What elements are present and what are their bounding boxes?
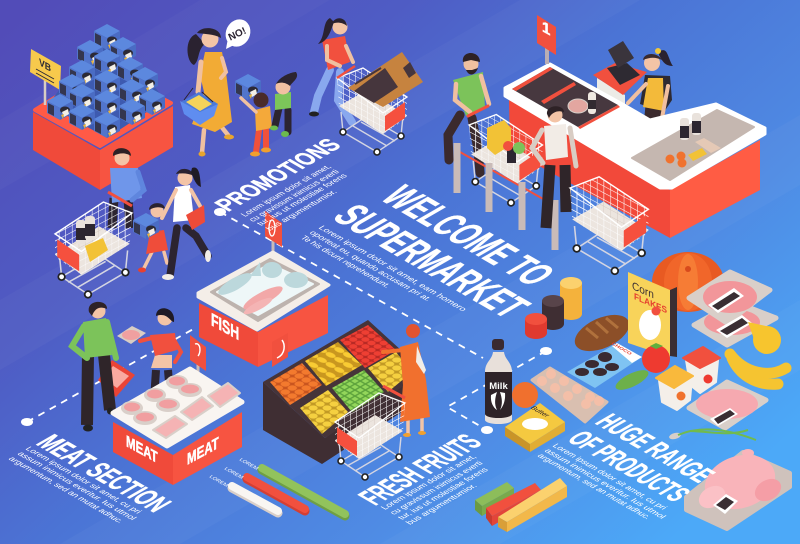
- cash desk: [593, 41, 647, 110]
- sign: banana: [272, 333, 288, 367]
- legend bar: green: [262, 468, 345, 516]
- pumpkin: [652, 252, 724, 312]
- person: man in blue with cart: [110, 148, 144, 228]
- labels: MEAT: [126, 433, 219, 469]
- milk bottle: Milk: [489, 381, 508, 392]
- connector dots: [21, 208, 552, 434]
- cereal box: corn flakes: Corn: [632, 280, 654, 302]
- cashier: [628, 48, 673, 122]
- meat trays: [121, 375, 240, 438]
- person: girl crying: [270, 72, 297, 137]
- legend labels: LOREM: [223, 467, 244, 480]
- person: woman in red top holding tray: [117, 308, 181, 400]
- counter faces: [509, 100, 760, 238]
- pear: [748, 322, 781, 354]
- person: woman in white top with red bag: [162, 168, 211, 280]
- paragraph: promotions: Lorem ipsum dolor sit amet,: [238, 163, 333, 218]
- basket: [180, 88, 218, 125]
- title: welcome to supermarket: WELCOME TO: [370, 179, 565, 292]
- dashed connector: promotions: [220, 212, 483, 358]
- queue posts and ropes: [457, 143, 555, 250]
- sign: VB: VB: [39, 57, 51, 75]
- person: bearded man in green: [448, 53, 489, 173]
- tomato: [642, 343, 670, 373]
- person: woman in yellow dress with basket: [180, 15, 255, 157]
- sign: fish: [265, 211, 282, 254]
- sign: meat: [190, 335, 206, 378]
- orange: [512, 382, 538, 408]
- bin: yellow fruit: [368, 352, 412, 392]
- paragraph: fresh fruits: Lorem ipsum dolor sit amet,: [378, 453, 479, 511]
- legend labels: LOREM: [208, 475, 229, 488]
- sink area: [632, 110, 754, 180]
- person: boy with box: [235, 74, 272, 156]
- groceries: [487, 120, 525, 163]
- panel: checkout counter: [505, 15, 765, 238]
- bin: greens: [332, 370, 384, 412]
- stand body: [263, 320, 425, 464]
- panel: fruit stand: [263, 320, 425, 464]
- monitor: [607, 63, 640, 85]
- dashed connector: products to fresh fruits: [447, 351, 546, 430]
- cart contents: [76, 216, 108, 262]
- bread: [569, 308, 635, 358]
- stand base: [33, 68, 173, 190]
- heading: promotions: PROMOTIONS: [209, 135, 348, 215]
- butter box: [505, 403, 565, 452]
- paragraph: huge range: argumentum, sed an mutat adhuc.: [535, 452, 654, 521]
- boxed appliance: [348, 52, 423, 107]
- legend labels: [208, 458, 259, 488]
- bin: pears: [300, 390, 348, 434]
- intro paragraph: Te his dicunt reprehendunt.: [298, 234, 394, 289]
- speech bubble: NO!: [221, 15, 255, 51]
- paragraph: fresh fruits: tur, ius ut molestiae forens: [395, 466, 490, 521]
- bin: tomatoes: [340, 325, 396, 368]
- sign: checkout number 1: 1: [542, 18, 550, 39]
- meat trays: [689, 272, 776, 428]
- cylinders: yellow, dark, red: [525, 277, 582, 339]
- legend bar: white: [232, 486, 278, 513]
- legend bars: [208, 458, 345, 516]
- green onions: [668, 429, 756, 440]
- person: woman running with cart: [309, 18, 353, 122]
- intro paragraph: Lorem ipsum dolor sit amet, eam homero: [316, 224, 470, 313]
- title: welcome to supermarket: SUPERMARKET: [322, 198, 540, 324]
- whole chicken tray: [686, 446, 790, 529]
- labels: MEAT: MEAT: [187, 435, 219, 469]
- paragraph: huge range: assum inimicus everitur. Ius utmol: [542, 447, 669, 520]
- stand sides: [113, 412, 242, 485]
- egg tray: [532, 368, 607, 422]
- stand sides: [199, 295, 328, 367]
- stand top: [113, 369, 242, 446]
- heading: huge range of products: HUGE RANGE: [588, 410, 721, 487]
- bananas: [730, 354, 786, 384]
- shopping cart with groceries: [468, 106, 542, 206]
- legend labels: LOREM: [238, 458, 259, 471]
- stand top with ice and fish: [198, 252, 329, 330]
- sign: checkout number 1: [537, 15, 556, 64]
- paragraph: promotions: cu gravissum inimicus everti: [246, 168, 341, 223]
- shopping cart with boxed appliance: [337, 52, 423, 155]
- title: welcome to supermarket: [322, 179, 565, 324]
- paragraph: meat section: Lorem ipsum dolor sit amet, cu pri: [23, 445, 145, 515]
- heading: fresh fruits: FRESH FRUITS: [351, 429, 489, 510]
- paragraph: fresh fruits: [378, 453, 490, 526]
- pyramid of boxes: [47, 24, 165, 138]
- paragraph: fresh fruits: bus argumentumior.: [403, 482, 479, 526]
- chart: isometric bars: [475, 478, 567, 532]
- counter top: [505, 64, 765, 188]
- speech bubble: NO!: NO!: [227, 26, 248, 43]
- panel: products: [485, 252, 790, 529]
- person: man in white shirt: [532, 106, 576, 228]
- yogurt cups: [656, 347, 720, 410]
- sign: VB: [30, 49, 61, 105]
- shopping cart: empty: [570, 177, 648, 274]
- dashed connector: meat section: [27, 327, 197, 422]
- red shopping basket: [98, 360, 135, 397]
- paragraph: meat section: assum inimicus everitur. Ius utmol: [15, 450, 139, 522]
- cereal box: corn flakes: FLAKES: [634, 291, 667, 315]
- paragraph: fresh fruits: cu gravissum inimicus everti: [387, 459, 485, 516]
- heading: huge range of products: [560, 410, 721, 506]
- bin: oranges: [270, 363, 322, 405]
- panel: fish stand: [198, 211, 329, 367]
- shopping cart at fruit stand: [335, 386, 405, 480]
- bin: bananas: [305, 342, 362, 386]
- intro paragraph: oporteat eu, quando accusam pri at.: [307, 229, 435, 303]
- panel: meat stand: [113, 335, 242, 485]
- panel: promotional display stand: [30, 24, 173, 190]
- paragraph: promotions: tur, ius ut molestiae forens: [254, 172, 349, 227]
- label: FISH: FISH: [211, 309, 239, 344]
- sink items: [666, 113, 721, 168]
- shopping cart with bottles and boxes: [55, 192, 132, 298]
- chocolate box: CHOCO: [610, 342, 633, 356]
- fish: [216, 269, 254, 299]
- cereal box: corn flakes: [628, 272, 677, 357]
- conveyor belt: [512, 67, 618, 127]
- paragraph: promotions: bus argumentumior.: [263, 188, 339, 232]
- person: child with box: [133, 203, 168, 272]
- milk bottle: [485, 339, 512, 424]
- person: man in green sweater: [72, 302, 116, 432]
- labels: MEAT: MEAT: [126, 433, 158, 467]
- butter box: Butter: [528, 406, 551, 419]
- paragraph: huge range: Lorem ipsum dolor sit amet, cu pri: [550, 442, 670, 511]
- legend bar: red: [247, 477, 305, 511]
- cucumber: [613, 366, 651, 394]
- person: woman in orange dress: [383, 324, 430, 437]
- chocolate box: [567, 342, 642, 388]
- paragraph: meat section: argumentum, sed an mutat adhuc.: [6, 455, 127, 525]
